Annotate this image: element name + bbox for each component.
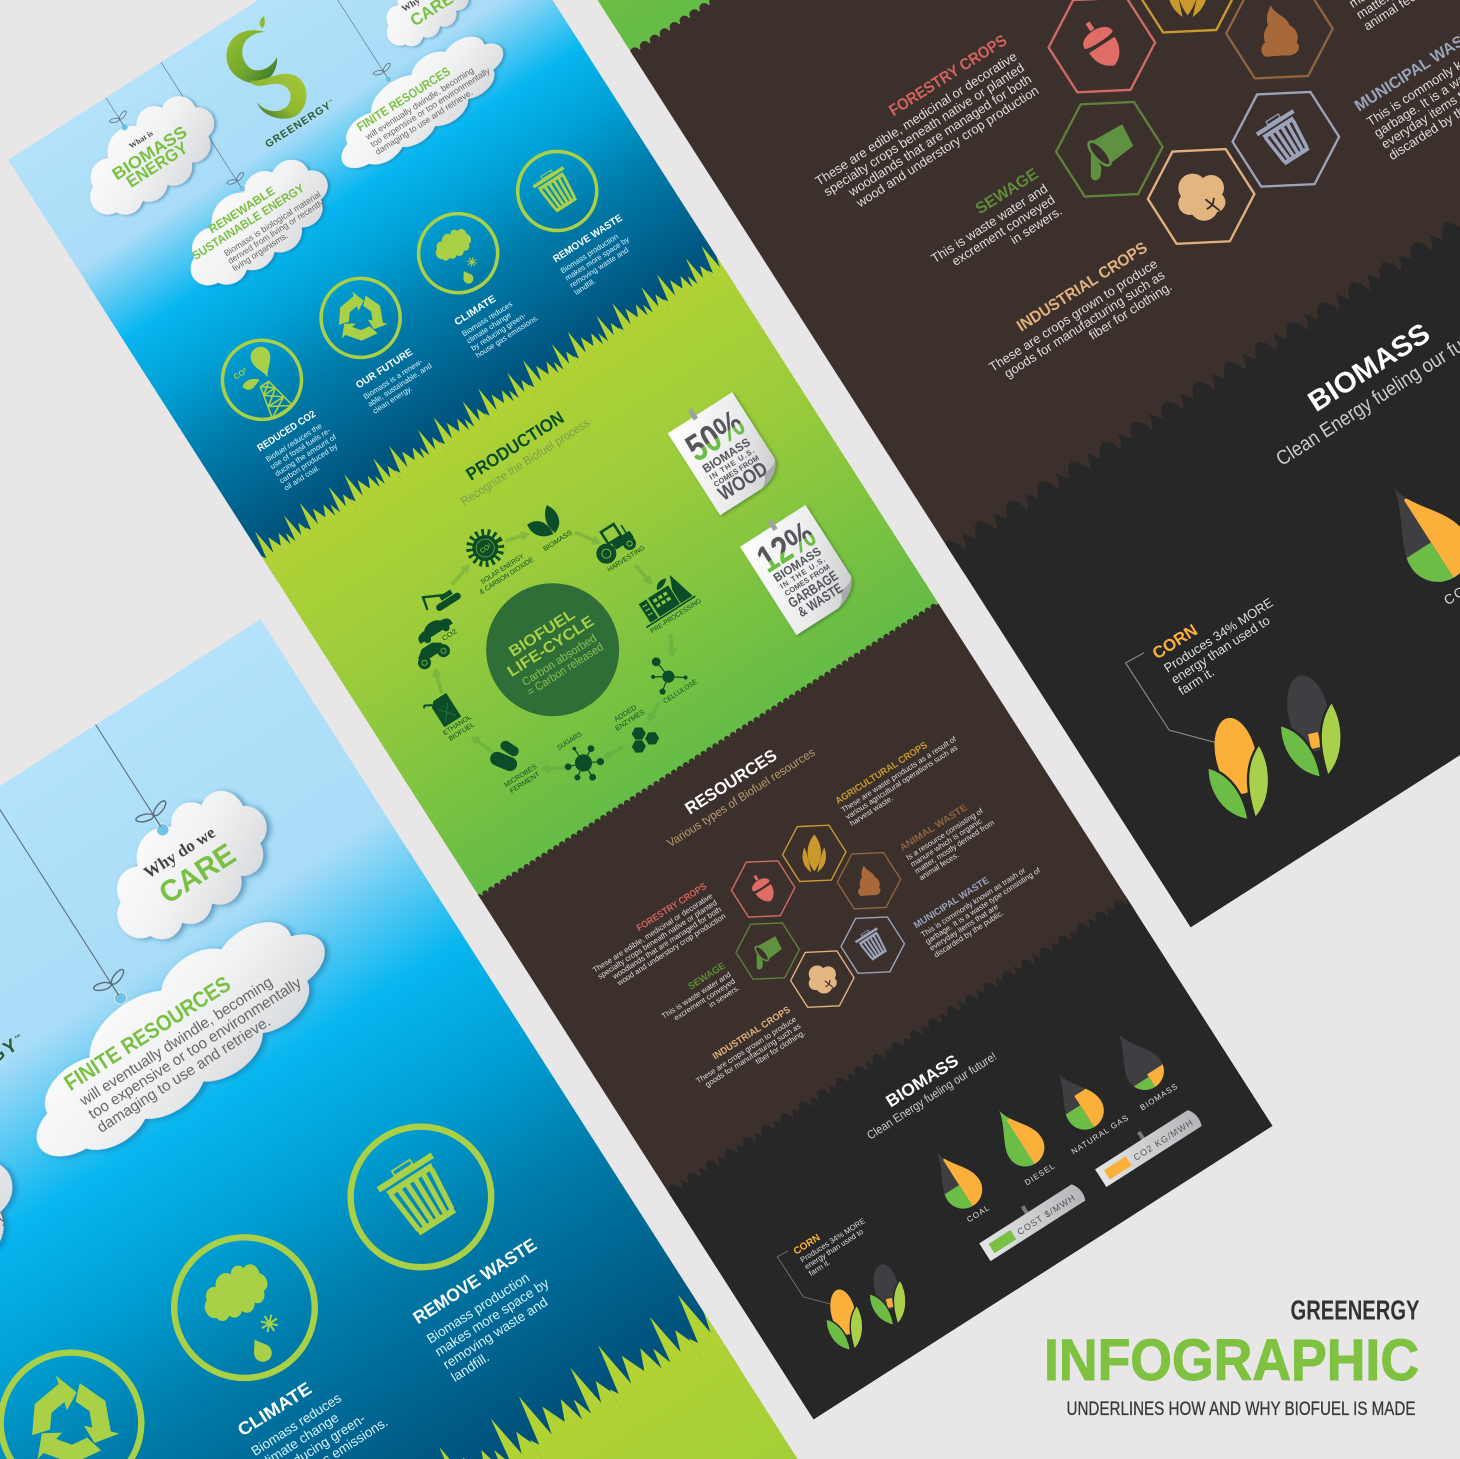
chart: coal drop bbox=[1394, 488, 1460, 582]
text: forestry crops: woodlands that are managed for both bbox=[610, 905, 723, 981]
cloud text: finite resources: damaging to use and retrieve. bbox=[373, 87, 474, 157]
text: industrial crops: fiber for clothing. bbox=[1086, 279, 1175, 343]
text: agricultural crops: various agricultural operations such as bbox=[844, 743, 959, 821]
center circle: biofuel life-cycle: LIFE-CYCLE bbox=[504, 613, 597, 681]
text: reduced co2: Biofuel reduces the bbox=[264, 421, 324, 464]
note: 50 percent wood: BIOMASS bbox=[700, 435, 753, 476]
heading: production: PRODUCTION bbox=[462, 407, 567, 485]
text: sewage: excrement conveyed bbox=[672, 977, 737, 1022]
panel: enlarged blue why we care board, lower left bbox=[0, 583, 1460, 1459]
labels: drop names: BIOMASS bbox=[1138, 1081, 1180, 1112]
label: microbes ferment bbox=[503, 763, 543, 796]
text: remove waste bbox=[409, 1234, 577, 1385]
note: 12 percent garbage and waste: 12% bbox=[750, 514, 823, 581]
text: municipal waste: discarded by the public. bbox=[932, 908, 1005, 959]
text: our future: OUR FUTURE bbox=[354, 347, 415, 391]
legend: co2 per mwh tape: CO2 KG/MWH bbox=[1132, 1117, 1195, 1163]
label: microbes ferment: FERMENT bbox=[509, 771, 541, 795]
note: 12 percent garbage and waste: COMES FROM bbox=[783, 562, 832, 598]
cloud text: finite resources: will eventually dwindle, becoming bbox=[363, 65, 476, 142]
label: added enzymes: ADDED bbox=[613, 704, 638, 724]
text: industrial crops: fiber for clothing. bbox=[754, 1028, 807, 1066]
icon: tractor bbox=[587, 519, 639, 568]
text: industrial crops: goods for manufacturing such as bbox=[703, 1021, 802, 1089]
text: our future: able, sustainable, and bbox=[366, 361, 433, 409]
text: forestry crops: specialty crops beneath native or planted bbox=[821, 60, 1027, 199]
text: corn callout: Produces 34% MORE bbox=[1161, 595, 1276, 676]
text: industrial crops: INDUSTRIAL CROPS bbox=[711, 1004, 793, 1062]
text: sewage: This is waste water and bbox=[660, 970, 733, 1021]
text: animal waste bbox=[898, 794, 1000, 882]
hexagon: agricultural crops bbox=[774, 812, 855, 895]
cloud text: finite resources bbox=[354, 46, 497, 158]
note: 50 percent wood: 50% bbox=[679, 403, 752, 470]
hexagon: industrial crops bbox=[1146, 148, 1256, 245]
icon: microbes bbox=[482, 734, 529, 782]
cloud text: finite resources: FINITE RESOURCES bbox=[354, 64, 453, 134]
cloud text: renewable sustainable energy: derived from living or recently bbox=[226, 197, 326, 266]
cloud text: what is biomass energy: ENERGY bbox=[123, 138, 192, 192]
labels: drop names: NATURAL GAS bbox=[1070, 1113, 1131, 1156]
hexagon: animal waste bbox=[1224, 0, 1334, 80]
label: harvesting: HARVESTING bbox=[606, 545, 646, 574]
icon: ethanol can bbox=[423, 692, 461, 731]
label: microbes ferment: MICROBES bbox=[503, 763, 539, 789]
text: forestry crops bbox=[585, 881, 728, 995]
text: industrial crops: INDUSTRIAL CROPS bbox=[1014, 238, 1151, 335]
text: sewage: SEWAGE bbox=[686, 960, 728, 993]
legend: cost per mwh tape: COST $/MWH bbox=[1015, 1192, 1078, 1237]
text: reduced co2: oil and coal. bbox=[282, 463, 321, 493]
heading: biomass: Clean Energy fueling our future! bbox=[864, 1049, 999, 1142]
text: municipal waste bbox=[1354, 34, 1460, 160]
legend: co2 per mwh tape bbox=[1091, 1101, 1203, 1187]
text: agricultural crops bbox=[834, 725, 967, 828]
text: corn callout: farm it. bbox=[1176, 664, 1217, 698]
cloud text: what is biomass energy: BIOMASS bbox=[109, 122, 191, 184]
text: forestry crops: wood and understory crop production bbox=[615, 911, 727, 988]
text: climate bbox=[453, 280, 540, 360]
icon: sugars bbox=[559, 738, 609, 789]
labels: drop names: COAL bbox=[965, 1203, 992, 1224]
text: sewage: in sewers. bbox=[707, 983, 741, 1010]
text: sewage bbox=[654, 960, 742, 1034]
text: sewage: excrement conveyed bbox=[949, 192, 1057, 269]
text: corn callout: CORN bbox=[792, 1232, 822, 1257]
text: agricultural crops: AGRICULTURAL CROPS bbox=[834, 740, 930, 807]
text: forestry crops: FORESTRY CROPS bbox=[886, 31, 1010, 120]
logo wordmark: ™ bbox=[328, 98, 335, 105]
callout line: corn bbox=[1124, 652, 1215, 743]
cloud: finite resources bbox=[60, 938, 314, 1138]
text: remove waste: REMOVE WASTE bbox=[409, 1234, 540, 1328]
text: animal waste: animal feces. bbox=[917, 850, 960, 882]
legend: cost per mwh tape bbox=[975, 1175, 1087, 1261]
text: remove waste bbox=[551, 213, 645, 297]
cloud text: renewable sustainable energy: living organisms. bbox=[230, 230, 290, 273]
text: forestry crops: These are edible, medicinal or decorative bbox=[812, 49, 1020, 189]
hexagon: forestry crops bbox=[1047, 0, 1156, 94]
hexagon: agricultural crops bbox=[1141, 0, 1234, 34]
label: sugars: SUGARS bbox=[556, 731, 584, 752]
icon: climate circle bbox=[404, 199, 513, 308]
heading: resources: RESOURCES bbox=[682, 746, 780, 818]
footer title: infographic: INFOGRAPHIC bbox=[1044, 1328, 1419, 1393]
text: forestry crops: These are edible, medicinal or decorative bbox=[591, 891, 714, 975]
text: industrial crops bbox=[688, 1004, 807, 1099]
label: biomass: BIOMASS bbox=[542, 529, 574, 553]
labels: drop names bbox=[965, 1081, 1180, 1224]
icon: remove waste circle bbox=[503, 136, 612, 246]
text: animal waste: matter, mostly derived from bbox=[913, 818, 996, 876]
note: 12 percent garbage and waste: & WASTE bbox=[795, 580, 845, 620]
hexagon: sewage bbox=[1054, 100, 1164, 198]
logo wordmark: ™ bbox=[13, 1032, 25, 1043]
note: 50 percent wood: WOOD bbox=[714, 458, 772, 505]
logo wordmark: GREENERGY bbox=[263, 99, 334, 151]
icon: enzymes bbox=[624, 720, 661, 756]
hexagon: municipal waste bbox=[832, 904, 913, 987]
icon: climate circle bbox=[147, 1211, 342, 1405]
text: remove waste: removing waste and bbox=[440, 1294, 550, 1372]
labels: drop names: DIESEL bbox=[1023, 1161, 1057, 1187]
label: pre-processing: PRE-PROCESSING bbox=[649, 598, 703, 635]
note: 12 percent garbage and waste bbox=[737, 500, 862, 635]
text: remove waste: makes more space by bbox=[432, 1275, 552, 1359]
chart: coal drop bbox=[916, 1136, 999, 1226]
note: 12 percent garbage and waste: BIOMASS bbox=[771, 544, 824, 585]
text: remove waste: makes more space by bbox=[563, 235, 631, 282]
heading: production: Recognize the Biofuel process bbox=[458, 416, 592, 508]
icon: reduced co2 circle bbox=[207, 325, 316, 434]
arrows: cycle flow bbox=[391, 488, 717, 814]
text: corn callout: farm it. bbox=[807, 1258, 832, 1278]
note: 12 percent garbage and waste: GARBAGE bbox=[785, 567, 841, 611]
heading: biomass: BIOMASS bbox=[883, 1051, 962, 1111]
footer title block bbox=[1044, 1294, 1420, 1420]
icon: remove waste circle bbox=[324, 1100, 518, 1294]
cloud text: what is biomass energy: What is bbox=[127, 129, 155, 151]
text: climate: Biomass reduces bbox=[460, 299, 514, 338]
label: ethanol biofuel bbox=[442, 714, 477, 744]
cloud text: finite resources: too expensive or too environmentally bbox=[368, 65, 492, 149]
cloud: why do we care: Why do we bbox=[140, 822, 219, 882]
text: animal waste: ANIMAL WASTE bbox=[898, 802, 970, 854]
note: 12 percent garbage and waste: IN THE U.S. bbox=[778, 555, 827, 591]
heading: biomass: BIOMASS bbox=[1303, 317, 1436, 418]
text: animal waste fragment bbox=[1350, 0, 1415, 30]
panel: enlarged resources and biomass board, upper right bbox=[598, 0, 1460, 928]
cloud text: what is biomass energy bbox=[103, 113, 198, 196]
text: reduced co2: carbon produced by bbox=[278, 441, 339, 485]
text: remove waste: removing waste and bbox=[568, 245, 630, 290]
text: corn callout: Produces 34% MORE bbox=[799, 1216, 867, 1264]
cloud: why do we care bbox=[140, 820, 242, 912]
text: municipal waste: everyday items that are bbox=[928, 902, 1000, 953]
icon: cellulose bbox=[643, 649, 688, 695]
hexagon: municipal waste bbox=[1231, 90, 1340, 188]
text: forestry crops: woodlands that are managed for both bbox=[845, 71, 1034, 200]
text: reduced co2: REDUCED CO2 bbox=[256, 409, 318, 454]
callout line: corn bbox=[777, 1245, 834, 1317]
icon: biomass leaves bbox=[524, 503, 565, 543]
note: 50 percent wood: IN THE U.S. bbox=[707, 446, 756, 482]
icon: factory bbox=[629, 569, 696, 628]
icon: sun carbon dioxide: CO² bbox=[479, 542, 493, 555]
text: our future: clean energy. bbox=[371, 384, 414, 416]
label: solar energy: SOLAR ENERGY bbox=[480, 553, 526, 586]
note: 50 percent wood: COMES FROM bbox=[712, 453, 761, 489]
icon: recycle circle bbox=[306, 263, 415, 372]
text: sewage: in sewers. bbox=[1008, 203, 1065, 247]
text: corn callout: energy than used to bbox=[1168, 613, 1273, 687]
text: reduced co2: use of fossil fuels re- bbox=[269, 426, 332, 471]
text: our future: Biomass is a renew- bbox=[362, 357, 425, 401]
center circle: biofuel life-cycle: Carbon absorbed bbox=[520, 632, 599, 689]
heading: resources: Various types of Biofuel resources bbox=[664, 745, 818, 850]
label: co2: CO2 bbox=[441, 628, 459, 643]
text: industrial crops: These are crops grown to produce bbox=[695, 1015, 798, 1085]
text: animal waste: Is a resource consisting of bbox=[904, 806, 985, 862]
text: reduced co2 bbox=[256, 406, 348, 493]
hexagon: sewage bbox=[727, 910, 808, 993]
cloud: finite resources: will eventually dwindle, becoming bbox=[76, 974, 276, 1110]
text: remove waste: landfill. bbox=[573, 276, 597, 297]
label: ethanol biofuel: BIOFUEL bbox=[448, 721, 476, 743]
cloud text: renewable sustainable energy: Biomass is biological material bbox=[222, 189, 323, 258]
icon: recycle circle bbox=[0, 1326, 168, 1459]
text: climate: Biomass reduces bbox=[249, 1390, 344, 1459]
text: remove waste: REMOVE WASTE bbox=[551, 213, 625, 265]
label: added enzymes: ENZYMES bbox=[614, 709, 646, 733]
cloud: why do we care: CARE bbox=[153, 838, 242, 911]
text: municipal waste: MUNICIPAL WASTE bbox=[912, 875, 992, 931]
cloud: finite resources: damaging to use and retrieve. bbox=[94, 1013, 274, 1136]
text: our future bbox=[354, 342, 438, 416]
icon: car bbox=[414, 613, 455, 647]
text: reduced co2: ducing the amount of bbox=[273, 432, 338, 478]
hexagon: animal waste bbox=[829, 839, 909, 922]
text: agricultural crops: These are waste products as a result of bbox=[840, 734, 959, 814]
label: cellulose: CELLULOSE bbox=[662, 678, 699, 705]
text: corn callout: CORN bbox=[1149, 620, 1201, 663]
chart: diesel drop bbox=[1000, 1110, 1044, 1166]
hexagon: industrial crops bbox=[782, 938, 863, 1021]
text: climate: climate change bbox=[465, 310, 513, 345]
text: industrial crops: goods for manufacturing such as bbox=[1001, 267, 1167, 381]
label: ethanol biofuel: ETHANOL bbox=[442, 714, 473, 737]
icon: depleted corn bbox=[1281, 676, 1340, 776]
center circle: biofuel life-cycle: BIOFUEL bbox=[506, 606, 578, 661]
text: remove waste: landfill. bbox=[448, 1349, 492, 1385]
icon: depleted corn bbox=[863, 1261, 911, 1329]
text: climate: CLIMATE bbox=[234, 1378, 315, 1440]
text: municipal waste: This is commonly known as trash or bbox=[919, 866, 1027, 939]
label: added enzymes bbox=[610, 702, 646, 733]
text: forestry crops: specialty crops beneath native or planted bbox=[596, 898, 719, 981]
cloud text: renewable sustainable energy: SUSTAINABLE ENERGY bbox=[190, 181, 307, 263]
text: corn callout bbox=[792, 1207, 875, 1279]
cloud text: renewable sustainable energy bbox=[182, 164, 332, 288]
text: forestry crops: wood and understory crop production bbox=[853, 83, 1041, 211]
text: climate: house gas emissions. bbox=[474, 313, 540, 360]
hexagon: forestry crops bbox=[723, 847, 803, 930]
cloud: finite resources: FINITE RESOURCES bbox=[60, 971, 235, 1096]
icon: motorcycle bbox=[412, 636, 452, 672]
text: industrial crops: These are crops grown to produce bbox=[986, 256, 1160, 375]
text: climate: by reducing green- bbox=[469, 311, 528, 353]
icon: sun carbon dioxide bbox=[465, 527, 506, 569]
text: climate: CLIMATE bbox=[453, 293, 499, 328]
center circle: biofuel life-cycle: = Carbon released bbox=[525, 641, 606, 699]
text: remove waste: Biomass production bbox=[424, 1270, 532, 1347]
cloud: renewable fragment bbox=[0, 1195, 20, 1343]
label: solar energy: & CARBON DIOXIDE bbox=[478, 556, 536, 596]
chart: natural gas drop bbox=[1059, 1074, 1104, 1130]
text: sewage: SEWAGE bbox=[972, 165, 1042, 218]
icon: full corn bbox=[1208, 718, 1268, 819]
text: municipal waste bbox=[912, 848, 1051, 960]
text: sewage: This is waste water and bbox=[928, 181, 1050, 266]
text: climate bbox=[234, 1353, 391, 1459]
chart: biomass drop bbox=[1119, 1034, 1164, 1090]
text: agricultural crops: harvest waste. bbox=[848, 794, 895, 828]
text: forestry crops: FORESTRY CROPS bbox=[635, 881, 709, 934]
cloud: finite resources: too expensive or too environmentally bbox=[86, 974, 305, 1123]
text: animal waste: manure which is organic bbox=[909, 816, 984, 869]
icon: crane bbox=[420, 580, 462, 617]
text: municipal waste: garbage. It is a waste type consisting of bbox=[924, 865, 1043, 946]
cloud text: renewable sustainable energy: RENEWABLE bbox=[206, 184, 278, 236]
center circle: biofuel life-cycle bbox=[461, 558, 645, 742]
note: 50 percent wood bbox=[664, 386, 785, 515]
icon: greenergy logo bbox=[226, 16, 306, 119]
text: remove waste: Biomass production bbox=[559, 232, 620, 275]
icon: full corn bbox=[819, 1286, 868, 1354]
icon: reduced co2 circle: CO² bbox=[232, 366, 249, 382]
text: corn callout: energy than used to bbox=[803, 1227, 865, 1271]
